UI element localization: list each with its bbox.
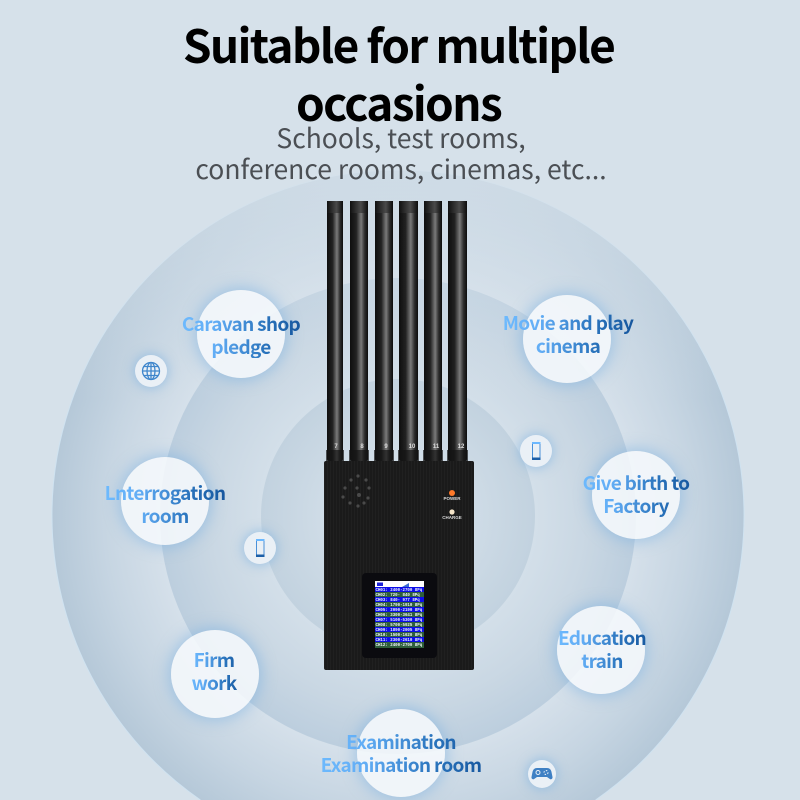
icon: phone	[244, 532, 276, 564]
bubble: Examination room	[357, 709, 445, 797]
device: jammer with antennas and screen: POWER	[443, 496, 461, 501]
screen: CH07: 5100-5300 8Pq	[376, 619, 423, 623]
label: Examination room	[311, 730, 491, 776]
subtitle	[195, 117, 607, 187]
antennas	[326, 201, 468, 461]
antenna numbers: 7	[334, 444, 338, 450]
label: Movie and play cinema: Movie and play	[503, 309, 633, 336]
label: Examination room: Examination room	[321, 751, 481, 778]
device: jammer with antennas and screen: CHARGE	[442, 515, 462, 520]
antenna numbers: 12	[458, 444, 465, 450]
bubble: Give birth to Factory	[592, 451, 680, 539]
label: Movie and play cinema: cinema	[536, 332, 600, 359]
label: Interrogation room: Lnterrogation	[105, 479, 225, 506]
label: Firm work	[184, 648, 244, 694]
label: Education train: Education	[558, 624, 646, 651]
antenna numbers	[334, 444, 465, 450]
title	[183, 11, 614, 135]
label: Firm work: Firm	[194, 646, 234, 673]
screen: CH02: 720- 840 8Pq	[376, 594, 420, 598]
label: Movie and play cinema	[498, 311, 638, 357]
label: Interrogation room	[100, 481, 230, 527]
bubble: Caravan shop pledge	[197, 290, 285, 378]
screen bezel	[362, 573, 437, 658]
antenna numbers: 9	[384, 444, 388, 450]
antenna numbers: 8	[360, 444, 364, 450]
device body	[324, 461, 474, 670]
bubble: Movie and play cinema	[523, 295, 611, 383]
screen: CH08: 5700-5925 8Pq	[376, 624, 423, 628]
title: Suitable for multiple	[183, 11, 614, 77]
subtitle: Schools, test rooms,	[276, 117, 526, 156]
label: Education train: train	[581, 647, 623, 674]
screen: CH01: 2400-2700 8Pq	[376, 589, 423, 593]
subtitle: conference rooms, cinemas, etc...	[195, 148, 607, 187]
label: Interrogation room: room	[141, 502, 189, 529]
icon: phone	[520, 435, 552, 467]
label: Give birth to Factory	[576, 471, 696, 517]
power LED	[449, 490, 455, 496]
screen: CH04: 1790-1910 8Pq	[376, 604, 423, 608]
label: Caravan shop pledge: pledge	[211, 333, 271, 360]
screen: CH12: 2400-2700 8Pq	[376, 644, 423, 648]
speaker grille	[341, 474, 371, 508]
label: Examination room: Examination	[346, 728, 456, 755]
label: Firm work: work	[191, 669, 237, 696]
screen: CH03: 840- 977 8Pq	[376, 599, 420, 603]
label: Give birth to Factory: Factory	[603, 492, 669, 519]
icon: game controller	[528, 760, 556, 788]
antenna numbers: 10	[409, 444, 416, 450]
screen: CH09: 1890-2005 8Pq	[376, 629, 423, 633]
antenna numbers: 11	[433, 444, 440, 450]
screen	[375, 581, 424, 648]
label: Caravan shop pledge: Caravan shop	[182, 310, 300, 337]
icon: globe	[135, 355, 167, 387]
screen: CH10: 1500-1620 8Pq	[376, 634, 423, 638]
screen: CH11: 2300-2610 8Pq	[376, 639, 423, 643]
bubble: Firm work	[171, 630, 259, 718]
label: Give birth to Factory: Give birth to	[583, 469, 689, 496]
title: occasions	[296, 69, 501, 135]
screen: CH06: 3300-3641 8Pq	[376, 614, 423, 618]
bubble: Education train	[557, 606, 645, 694]
charge LED	[449, 509, 455, 515]
screen: CH05: 2090-2190 8Pq	[376, 609, 423, 613]
label: Caravan shop pledge	[176, 312, 306, 358]
bubble: Interrogation room	[121, 457, 209, 545]
label: Education train	[552, 626, 652, 672]
